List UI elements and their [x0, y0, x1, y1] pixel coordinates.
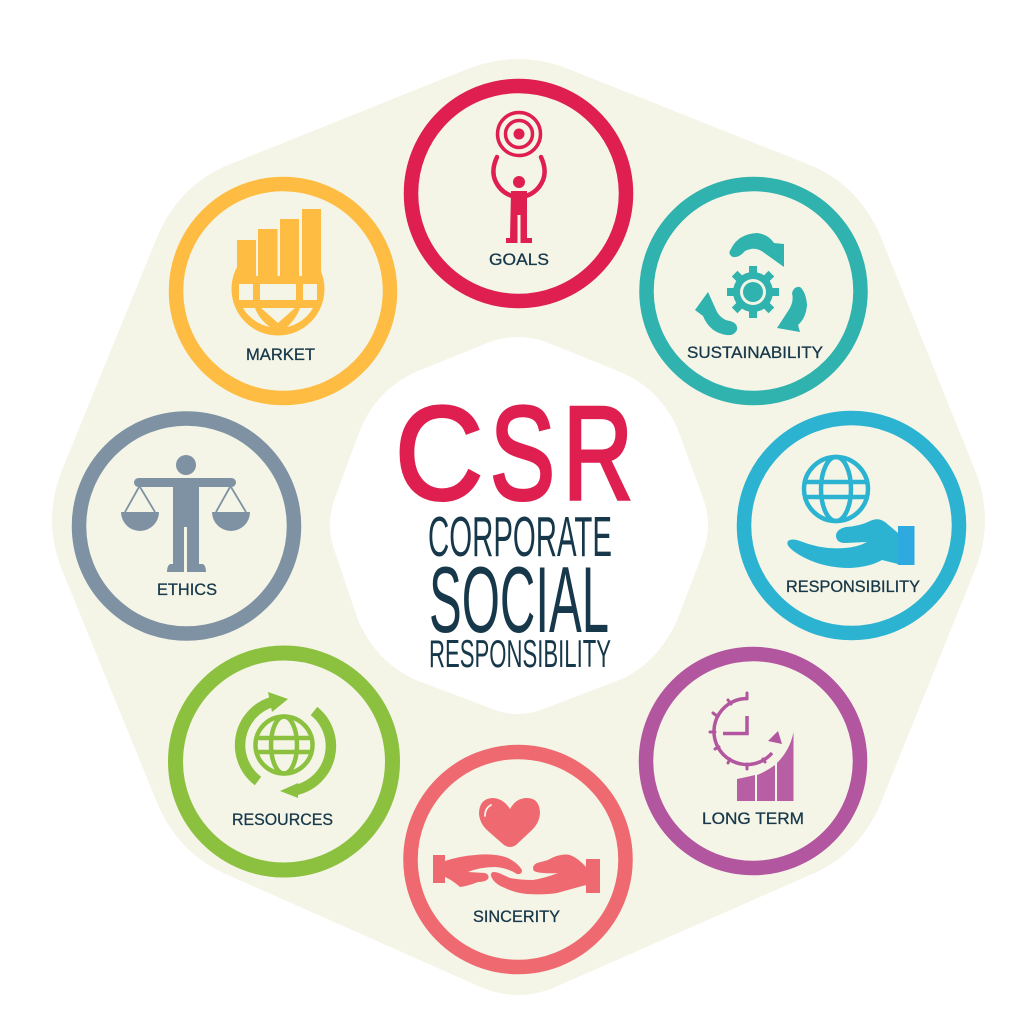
ring	[176, 184, 390, 398]
ring	[646, 184, 860, 398]
ring	[410, 752, 626, 967]
subtitle: responsibility: RESPONSIBILITY	[429, 633, 611, 676]
item: resources	[176, 653, 392, 870]
icon: clock with growth bars	[710, 693, 794, 801]
label: RESOURCES	[232, 810, 333, 829]
label: SINCERITY	[473, 907, 560, 926]
icon: bars over globe	[232, 209, 324, 336]
item: sustainability	[646, 184, 860, 398]
item: long term	[646, 654, 860, 868]
item: responsibility	[744, 418, 959, 633]
icon: person as balance scale	[121, 455, 250, 572]
icon: gear and cycle arrows	[695, 233, 807, 335]
ring	[646, 654, 860, 868]
label: RESPONSIBILITY	[786, 577, 920, 596]
subtitle: corporate: CORPORATE	[428, 505, 612, 569]
item: sincerity	[410, 752, 626, 967]
label: LONG TERM	[702, 809, 804, 828]
icon: person holding target	[493, 112, 545, 243]
item: goals	[411, 86, 626, 301]
central title	[395, 380, 633, 676]
label: GOALS	[489, 250, 549, 269]
item: ethics	[79, 418, 294, 634]
item: market	[176, 184, 390, 398]
panel: central white shape	[330, 337, 708, 714]
icon: hands and heart	[433, 798, 600, 894]
ring	[411, 86, 626, 301]
label: SUSTAINABILITY	[687, 343, 823, 362]
ring	[744, 418, 959, 633]
icon: hand holding globe	[787, 457, 914, 568]
icon: globe with cycle arrows	[240, 692, 331, 798]
label: MARKET	[246, 345, 315, 364]
heading: CSR: R	[563, 380, 633, 528]
heading: CSR	[395, 380, 633, 528]
heading: CSR: S	[490, 380, 555, 528]
label: ETHICS	[157, 580, 217, 599]
heading: CSR: C	[395, 380, 483, 528]
ring	[79, 418, 294, 634]
subtitle: social: SOCIAL	[429, 547, 609, 652]
ring	[176, 653, 392, 870]
